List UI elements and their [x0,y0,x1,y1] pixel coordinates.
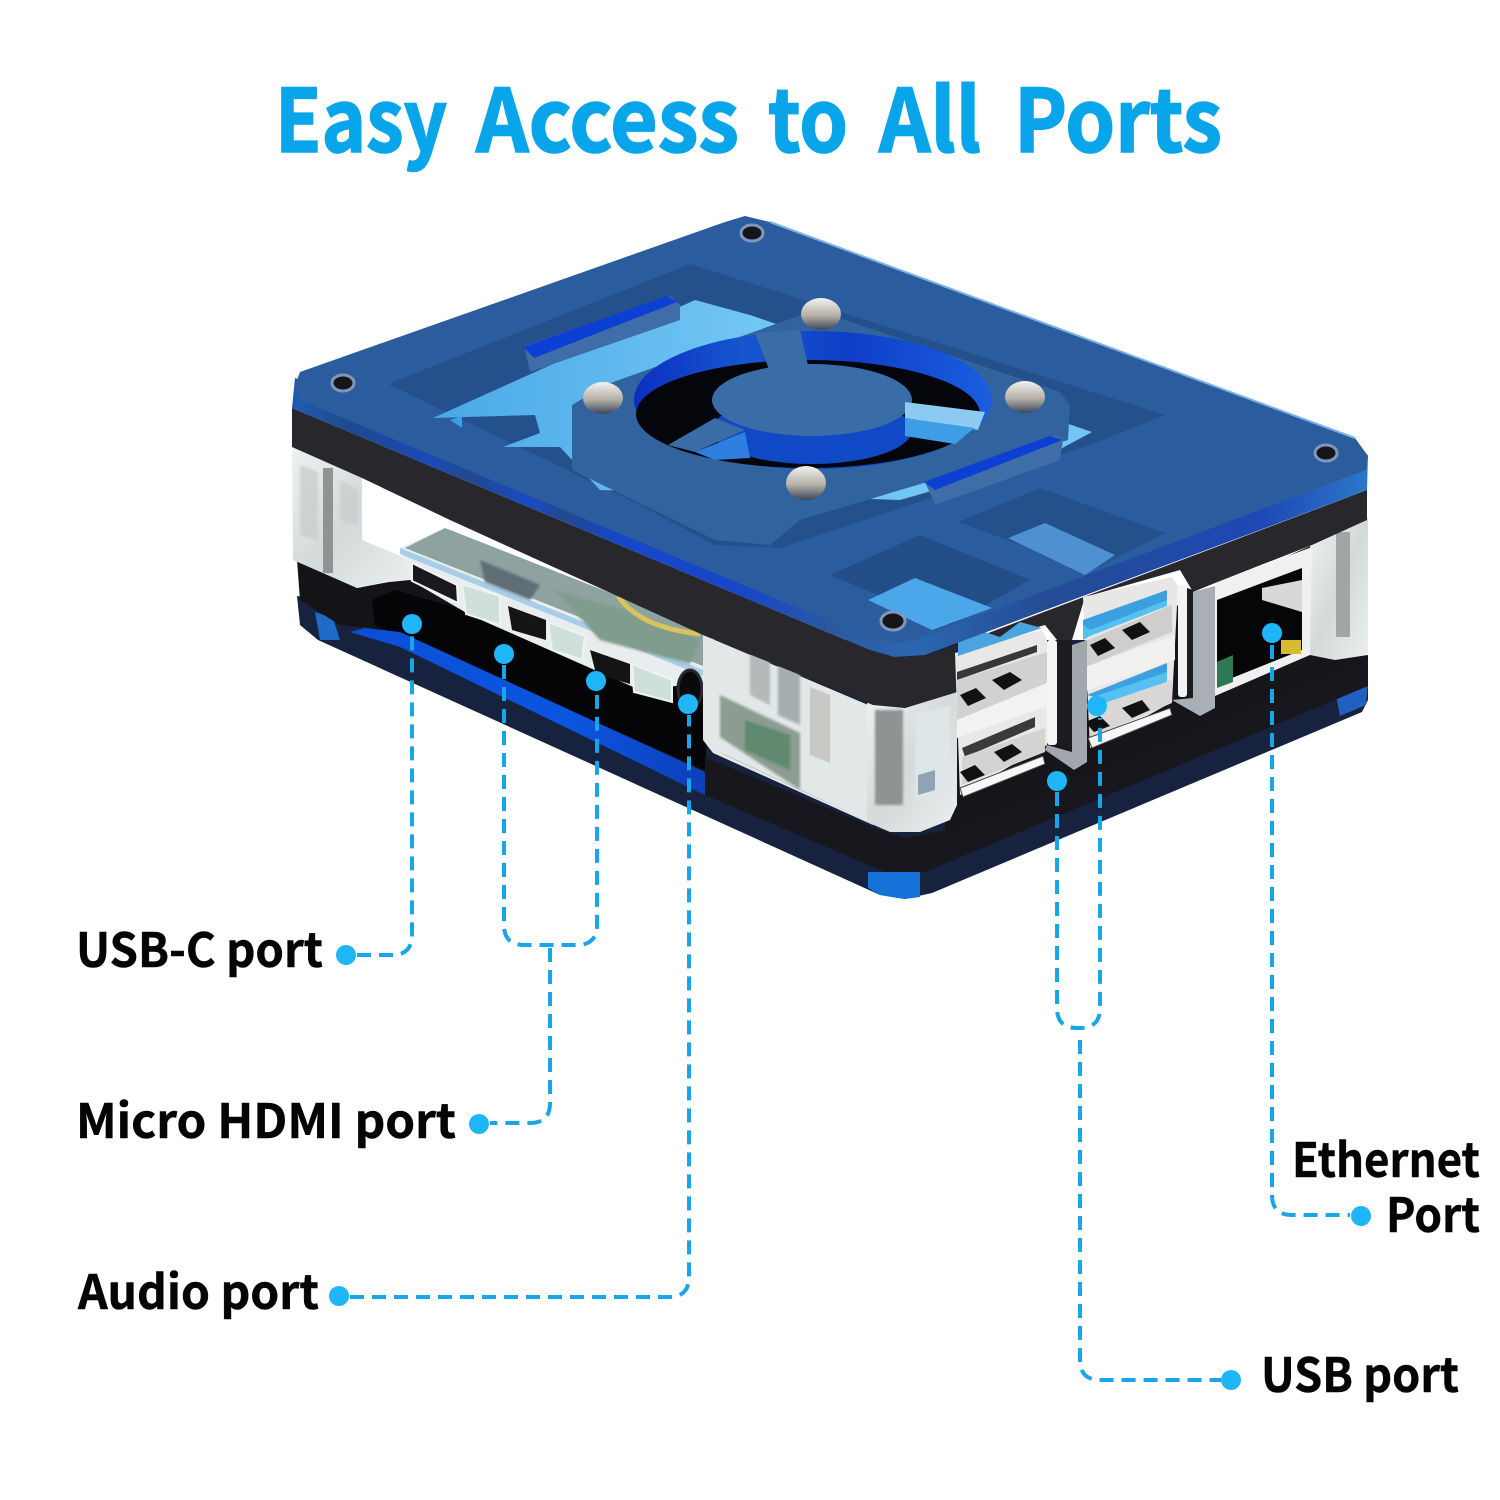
corner screws [332,225,1337,630]
callout: Micro HDMI port [76,644,606,1152]
top plate edge [292,378,1368,657]
fan arm left [668,418,745,452]
top plate surface [295,216,1368,643]
clear front-right post [867,692,957,832]
title: Access [475,52,739,178]
fan arm lower highlight [695,432,750,460]
bottom plate [297,596,1368,899]
window accent [450,416,462,428]
audio jack [678,670,702,708]
lower black tray [297,520,1368,872]
callout: USB port [1047,696,1459,1406]
callout: Ethernet port [1262,623,1480,1246]
vent slot: left [523,296,680,372]
clear window with PCB [400,528,712,690]
callout: Micro HDMI port: Micro HDMI port [76,1083,456,1152]
fan hub rim [712,396,912,464]
title: Ports [1014,52,1222,178]
clear dividers [1045,586,1215,770]
callout: USB-C port [76,614,422,981]
product: Raspberry Pi case [292,216,1368,899]
callout: USB-C port: USB-C port [76,912,323,981]
blue glow band [350,628,705,795]
micro HDMI sockets [508,606,630,684]
fan arm top [755,330,808,372]
callout: USB port: USB port [1261,1337,1459,1406]
clear left post [292,447,410,588]
title: Easy [275,52,447,178]
black upper layer [292,408,1367,708]
battery window bottom [830,535,1030,630]
fan screws [583,298,1045,500]
fan mount [572,310,1070,545]
callout: Audio port: Audio port [77,1254,319,1323]
callout: Ethernet port: Port [1386,1177,1480,1246]
left USB block [955,622,1057,797]
title: to [768,52,848,178]
callout: Ethernet port: Ethernet [1292,1122,1480,1191]
clear right post [1310,518,1368,660]
top plate highlight edge [770,222,1355,438]
fan opening [634,330,992,469]
USB-C socket [412,563,458,603]
callout: Audio port [77,694,698,1323]
clear pillars between sockets [462,584,672,702]
fan arm right [905,402,985,430]
fan hub [712,364,912,436]
battery window right [958,488,1165,575]
vent slot: right [924,435,1063,505]
inner dark frame [388,264,1165,548]
light blue window [433,300,1092,500]
title: All [878,52,981,178]
title [275,52,1222,178]
ethernet port [1215,547,1312,696]
clear front panel [703,635,873,825]
right USB block [1083,577,1187,748]
